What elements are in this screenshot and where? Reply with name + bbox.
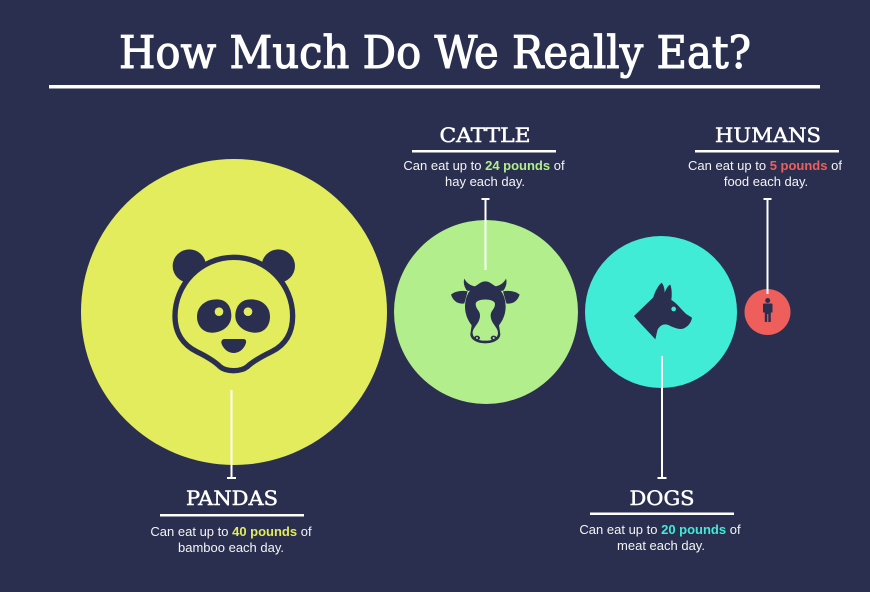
pandas heading: PANDAS bbox=[186, 486, 278, 510]
title: How Much Do We Really Eat? bbox=[119, 26, 751, 79]
panel: dogs: meat each day. bbox=[617, 538, 705, 553]
cattle text: Can eat up to 24 pounds of bbox=[403, 158, 565, 173]
dogs text: Can eat up to 20 pounds of bbox=[579, 522, 741, 537]
cattle leader line bbox=[482, 199, 490, 270]
humans leader line bbox=[764, 199, 772, 294]
icon: dog bbox=[634, 283, 692, 339]
panel: cattle bbox=[394, 123, 578, 404]
panel: cattle: hay each day. bbox=[445, 174, 525, 189]
dogs heading: DOGS bbox=[630, 486, 694, 510]
humans text: Can eat up to 5 pounds of bbox=[688, 158, 842, 173]
dogs leader line bbox=[658, 356, 666, 478]
panel: humans: food each day. bbox=[724, 174, 808, 189]
pandas leader line bbox=[227, 390, 236, 478]
icon: panda bbox=[173, 249, 295, 371]
panel: pandas: bamboo each day. bbox=[178, 540, 284, 555]
panel: humans bbox=[688, 123, 842, 335]
dogs circle bbox=[585, 236, 737, 388]
icon: person bbox=[763, 298, 772, 322]
cattle heading: CATTLE bbox=[440, 123, 530, 147]
panda circle bbox=[81, 159, 387, 465]
panel: dogs bbox=[579, 236, 741, 553]
pandas text: Can eat up to 40 pounds of bbox=[150, 524, 312, 539]
cattle circle bbox=[394, 220, 578, 404]
humans heading: HUMANS bbox=[715, 123, 821, 147]
humans circle bbox=[744, 289, 790, 335]
icon: cow bbox=[451, 279, 520, 343]
panel: pandas bbox=[81, 159, 387, 555]
